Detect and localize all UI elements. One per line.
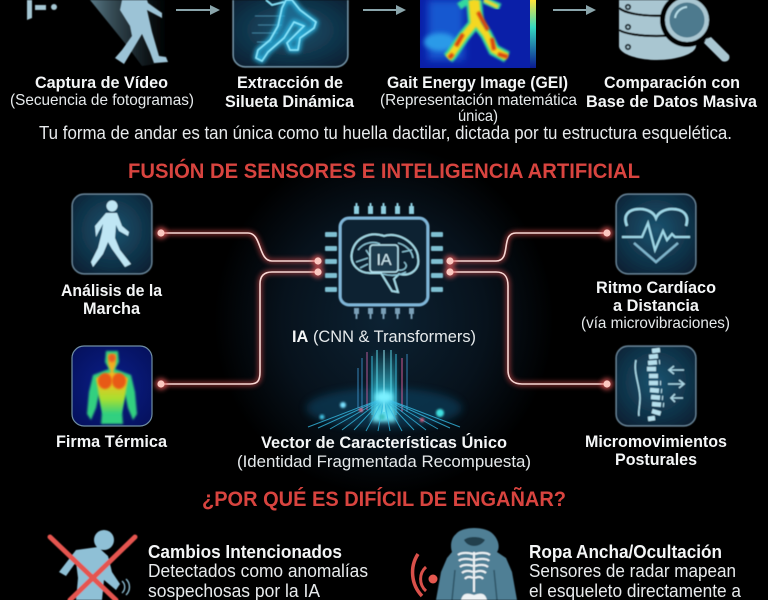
panel: AI chip (325, 203, 443, 319)
panel: thermal signature icon (72, 346, 152, 426)
heading: hard to fool: ¿POR QUÉ ES DIFÍCIL DE ENGAÑAR? (202, 488, 566, 511)
connector lines to the AI chip (161, 233, 607, 384)
thermal caption: Firma Térmica (56, 432, 168, 451)
heart rate caption: (vía microvibraciones) (581, 315, 730, 332)
step 2 caption: Silueta Dinámica (225, 92, 355, 111)
summary sentence: Tu forma de andar es tan única como tu huella dactilar, dictada por tu estructura esquelética. (39, 123, 732, 143)
posture caption: Micromovimientos (585, 432, 727, 451)
panel: posture spine icon (616, 346, 696, 426)
step 2 caption: Extracción de (237, 73, 343, 92)
panel: gait analysis icon (72, 194, 152, 274)
vector caption (237, 433, 531, 471)
icon: crossed-out altered walk (50, 530, 135, 600)
posture caption: Posturales (615, 450, 697, 469)
vector caption: Vector de Características Único (261, 433, 507, 452)
heart rate caption (581, 278, 730, 332)
AI caption: IA (CNN & Transformers) (292, 328, 476, 346)
heading: sensor fusion: FUSIÓN DE SENSORES E INTELIGENCIA ARTIFICIAL (128, 159, 640, 183)
arrow 3 (553, 5, 596, 15)
step 4: database and magnifier icon (619, 0, 729, 62)
analysis caption: Análisis de la (61, 281, 163, 300)
arrow 2 (363, 5, 406, 15)
heart rate caption: a Distancia (613, 296, 700, 315)
step 2: silhouette extraction panel (233, 0, 348, 67)
text: loose clothing: Ropa Ancha/Ocultación (529, 541, 722, 562)
posture caption (585, 432, 727, 469)
text: loose clothing: Sensores de radar mapean (529, 561, 736, 581)
arrow 1 (176, 5, 220, 15)
feature vector graphic (306, 350, 462, 431)
step 1 caption (10, 73, 194, 109)
step 3: gait energy image (420, 0, 536, 68)
step 1 caption: (Secuencia de fotogramas) (10, 92, 194, 109)
step 3 caption: (Representación matemática (380, 92, 577, 109)
connector end dots (155, 227, 613, 390)
analysis caption (61, 281, 163, 318)
step 3 caption: Gait Energy Image (GEI) (387, 73, 568, 92)
vector caption: (Identidad Fragmentada Recompuesta) (237, 452, 531, 471)
background glow behind AI chip (214, 145, 554, 495)
icon: radar waves (413, 554, 438, 596)
text: intentional changes (148, 541, 368, 600)
panel: AI chip: IA (376, 252, 392, 269)
text: intentional changes: Detectados como anomalías (148, 561, 368, 581)
step 4 caption: Base de Datos Masiva (586, 92, 758, 111)
step 4 caption: Comparación con (604, 73, 740, 92)
step 4 caption (586, 73, 758, 111)
text: intentional changes: Cambios Intencionados (148, 541, 342, 562)
step 3 caption (380, 73, 577, 125)
text: loose clothing (529, 541, 742, 600)
step 1 caption: Captura de Vídeo (35, 73, 168, 92)
step 1: video capture icon (27, 0, 170, 66)
step 3 caption: única) (458, 108, 498, 125)
heart rate caption: Ritmo Cardíaco (596, 278, 716, 297)
panel: heart rate icon (616, 194, 696, 274)
analysis caption: Marcha (83, 299, 141, 318)
step 2 caption (225, 73, 355, 111)
icon: hoodie with skeleton (436, 528, 517, 600)
